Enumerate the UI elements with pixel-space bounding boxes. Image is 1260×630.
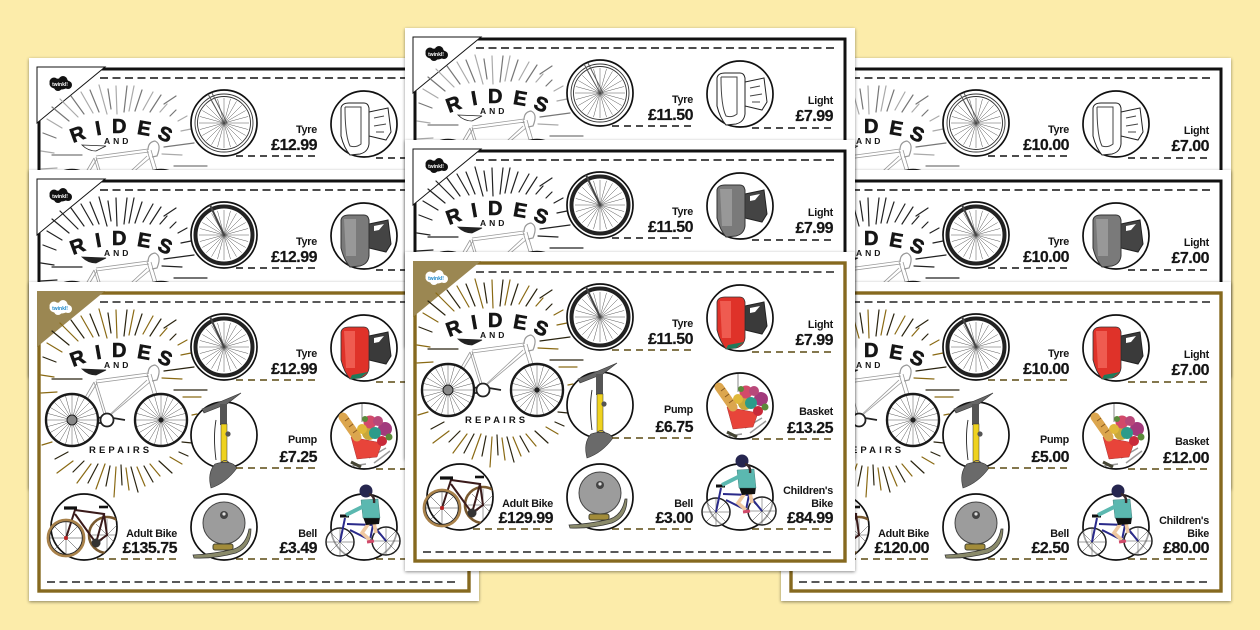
sheet: left outline card: RIDES bbox=[67, 116, 175, 148]
sheet: left colour card: £135.75 bbox=[123, 540, 178, 557]
sheet: centre outline card: £7.99 bbox=[795, 108, 834, 125]
sheet: left colour card: Pump bbox=[288, 434, 318, 446]
sheet: right greyscale card: £10.00 bbox=[1023, 249, 1070, 266]
title: RIDES bbox=[443, 310, 551, 342]
sheet: right greyscale card: AND bbox=[856, 248, 883, 258]
sheet: left colour card: RIDES bbox=[67, 340, 175, 372]
sheet: centre greyscale card: AND bbox=[480, 218, 507, 228]
sheet: centre greyscale card: £7.99 bbox=[795, 220, 834, 237]
sheet: right colour card: Light bbox=[1184, 349, 1210, 361]
title: AND bbox=[480, 330, 507, 340]
sheet: right colour card: Adult Bike bbox=[878, 528, 929, 540]
sunburst rays bbox=[417, 279, 583, 467]
price: tyre bbox=[612, 318, 694, 350]
sheet: centre greyscale card: Tyre bbox=[672, 206, 693, 218]
sheet: right colour card: £5.00 bbox=[1031, 449, 1070, 466]
sheet: right colour card: £2.50 bbox=[1031, 540, 1070, 557]
sheet: left colour card: Bell bbox=[298, 528, 317, 540]
sheet: right greyscale card: RIDES bbox=[819, 228, 927, 260]
title: REPAIRS bbox=[465, 415, 528, 426]
sheet: right colour card: Basket bbox=[1175, 436, 1210, 448]
price: light: Light bbox=[808, 319, 834, 331]
sheet: centre greyscale card bbox=[405, 140, 855, 459]
sheet: right colour card: AND bbox=[856, 360, 883, 370]
price: children's bike bbox=[752, 485, 834, 529]
sheet: left greyscale card: AND bbox=[104, 248, 131, 258]
sheet: right colour card: Pump bbox=[1040, 434, 1070, 446]
sheet: centre outline card: AND bbox=[480, 106, 507, 116]
sheet: centre outline card: twinkl! bbox=[428, 52, 444, 58]
price: pump: £6.75 bbox=[655, 419, 694, 436]
sheet: right colour card: £10.00 bbox=[1023, 361, 1070, 378]
icon: children's bike bbox=[702, 454, 776, 530]
price: basket: Basket bbox=[799, 406, 834, 418]
sheet: right colour card: £80.00 bbox=[1163, 540, 1210, 557]
sheet: left greyscale card bbox=[29, 170, 479, 489]
sheet: centre greyscale card: £11.50 bbox=[648, 219, 694, 236]
price: tyre: £11.50 bbox=[648, 331, 694, 348]
sheet: left colour card: Tyre bbox=[296, 348, 317, 360]
sheet: centre outline card: Light bbox=[808, 95, 834, 107]
sheet: right outline card: £7.00 bbox=[1171, 138, 1210, 155]
sheet: left colour card: £7.25 bbox=[279, 449, 318, 466]
sheet: left greyscale card: £12.99 bbox=[271, 249, 318, 266]
sheet: left colour card: twinkl! bbox=[52, 306, 68, 312]
price: pump bbox=[612, 404, 694, 438]
sheet: centre outline card: £11.50 bbox=[648, 107, 694, 124]
sheet: right outline card: Tyre bbox=[1048, 124, 1069, 136]
sheet: right outline card: Light bbox=[1184, 125, 1210, 137]
sheet: right outline card bbox=[781, 58, 1231, 377]
sheet: centre greyscale card: RIDES bbox=[443, 198, 551, 230]
sheet: centre outline card: Tyre bbox=[672, 94, 693, 106]
sheet: right outline card: AND bbox=[856, 136, 883, 146]
sheet: right greyscale card: £7.00 bbox=[1171, 250, 1210, 267]
sheet: left outline card: £12.99 bbox=[271, 137, 318, 154]
sheet: right outline card: RIDES bbox=[819, 116, 927, 148]
sheet: left outline card: Tyre bbox=[296, 124, 317, 136]
icon: adult bike bbox=[424, 464, 501, 530]
price: pump: Pump bbox=[664, 404, 694, 416]
price: bell: Bell bbox=[674, 498, 693, 510]
sheet: right greyscale card bbox=[781, 170, 1231, 489]
sheet: right colour card bbox=[781, 282, 1231, 601]
price: children's bike: Children's bbox=[783, 485, 833, 497]
logo: twinkl! bbox=[428, 276, 444, 282]
sheet: right colour card: £12.00 bbox=[1163, 450, 1210, 467]
sheet: right colour card: £7.00 bbox=[1171, 362, 1210, 379]
title bbox=[443, 310, 551, 426]
price: basket: £13.25 bbox=[787, 420, 834, 437]
sheet: centre greyscale card: Light bbox=[808, 207, 834, 219]
price: adult bike: £129.99 bbox=[499, 510, 554, 527]
price: bell: £3.00 bbox=[655, 510, 694, 527]
price: bell bbox=[612, 498, 694, 529]
icon: bell bbox=[567, 464, 633, 530]
price: basket bbox=[752, 406, 834, 439]
sheet: left colour card bbox=[29, 282, 479, 601]
icon: light bbox=[707, 285, 773, 351]
icon: pump bbox=[567, 363, 633, 458]
logo bbox=[426, 270, 448, 285]
price: adult bike bbox=[473, 498, 554, 529]
icon: white bicycle bbox=[422, 335, 563, 416]
sheet: centre colour card bbox=[405, 252, 855, 571]
price: children's bike: Bike bbox=[811, 498, 833, 510]
icon: basket bbox=[707, 373, 773, 439]
sheet: right colour card: Tyre bbox=[1048, 348, 1069, 360]
icon: tyre bbox=[567, 284, 633, 350]
sheet: left outline card: twinkl! bbox=[52, 82, 68, 88]
sheet: right colour card: REPAIRS bbox=[841, 445, 904, 456]
price: tyre: Tyre bbox=[672, 318, 693, 330]
price: children's bike: £84.99 bbox=[787, 510, 834, 527]
sheet: left colour card: Adult Bike bbox=[126, 528, 177, 540]
sheet: right colour card: Bell bbox=[1050, 528, 1069, 540]
sheet: left greyscale card: twinkl! bbox=[52, 194, 68, 200]
sheet: left colour card: £12.99 bbox=[271, 361, 318, 378]
sheet: right colour card: Children's bbox=[1159, 515, 1209, 527]
sheet: left outline card bbox=[29, 58, 479, 377]
sheet: centre outline card: RIDES bbox=[443, 86, 551, 118]
sheet: left colour card: AND bbox=[104, 360, 131, 370]
sheet: centre greyscale card: twinkl! bbox=[428, 164, 444, 170]
sheet: left outline card: AND bbox=[104, 136, 131, 146]
sheet: right outline card: £10.00 bbox=[1023, 137, 1070, 154]
sheet: left greyscale card: RIDES bbox=[67, 228, 175, 260]
sheet: right colour card: Bike bbox=[1187, 528, 1209, 540]
sheet: left greyscale card: Tyre bbox=[296, 236, 317, 248]
sheet: left colour card: £3.49 bbox=[279, 540, 318, 557]
sheet: right colour card: £120.00 bbox=[875, 540, 930, 557]
price: adult bike: Adult Bike bbox=[502, 498, 553, 510]
sheet: right colour card: RIDES bbox=[819, 340, 927, 372]
sheet: right greyscale card: Light bbox=[1184, 237, 1210, 249]
sheet: centre outline card bbox=[405, 28, 855, 347]
sheet: right greyscale card: Tyre bbox=[1048, 236, 1069, 248]
sheet: left colour card: REPAIRS bbox=[89, 445, 152, 456]
price: light: £7.99 bbox=[795, 332, 834, 349]
price: light bbox=[752, 319, 834, 352]
